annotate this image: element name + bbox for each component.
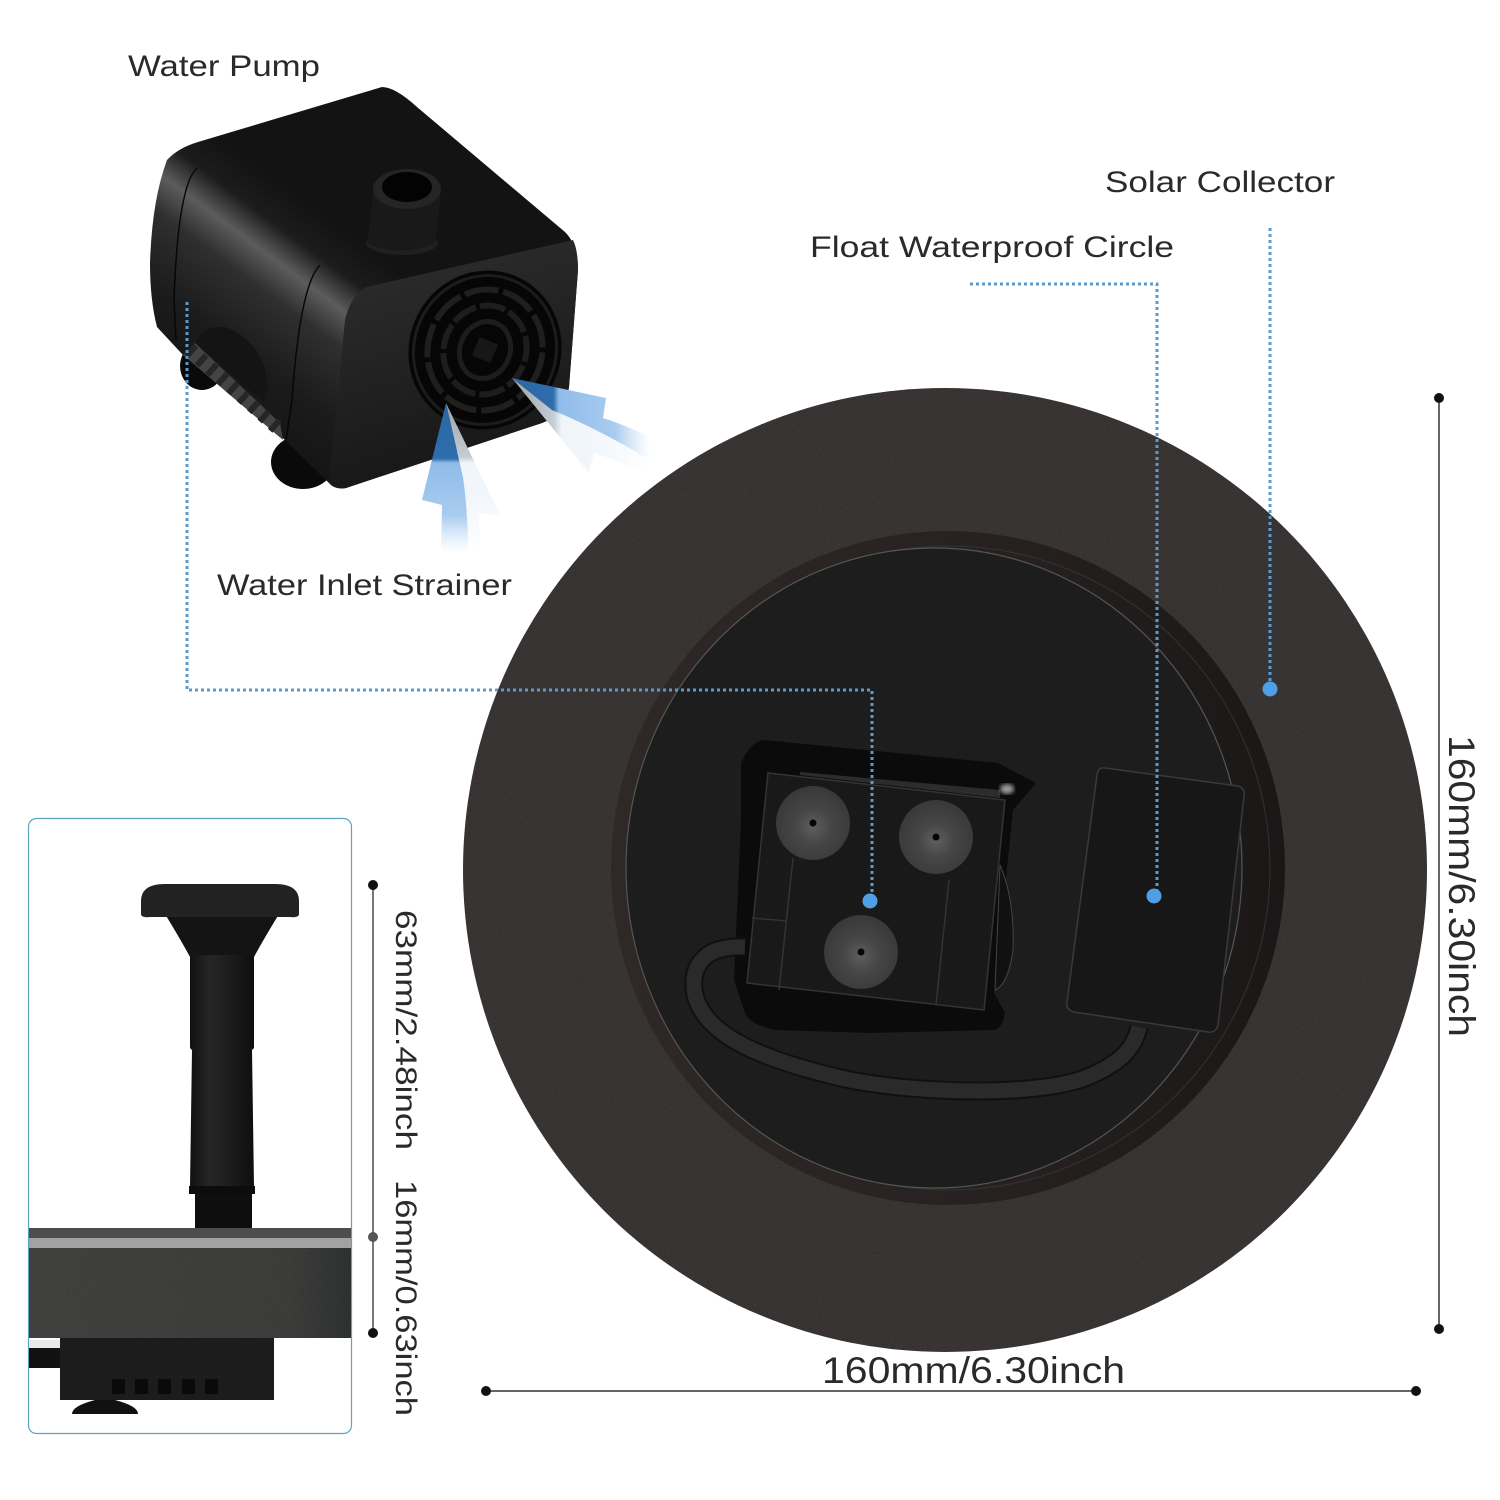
pump seams xyxy=(752,858,949,1005)
callout: pump leader xyxy=(187,302,878,908)
suction cups xyxy=(776,786,973,989)
pump vents xyxy=(800,772,1000,798)
solar panel back xyxy=(1067,768,1244,1032)
dimension: width of disc xyxy=(481,1350,1421,1396)
side seams xyxy=(174,168,320,440)
pump body xyxy=(150,87,578,488)
callout: float leader xyxy=(970,284,1162,904)
arrow one xyxy=(422,403,500,553)
callout: solar leader xyxy=(1262,228,1278,696)
faint rim line xyxy=(626,546,1270,1190)
water pump product xyxy=(150,87,585,489)
outer ring xyxy=(463,388,1427,1352)
pump fan edge xyxy=(995,865,1013,990)
pump under float xyxy=(29,1338,274,1414)
nozzle stem xyxy=(189,955,255,1230)
nozzle head xyxy=(141,884,299,957)
inner recess xyxy=(626,548,1242,1188)
float edge xyxy=(29,1228,351,1338)
inner band xyxy=(611,531,1285,1205)
pump recess xyxy=(734,740,1036,1033)
cable xyxy=(694,947,1139,1091)
dimension: height of disc: 160mm/6.30inch xyxy=(1441,735,1482,1037)
outlet nozzle xyxy=(366,169,441,255)
dimension: nozzle height xyxy=(368,880,422,1416)
bright spot xyxy=(1000,784,1014,794)
arrow two xyxy=(512,378,650,473)
grill xyxy=(385,247,585,453)
side circular recess xyxy=(195,327,268,402)
label: water inlet strainer: Water Inlet Strainer xyxy=(217,569,512,602)
label: water pump: Water Pump xyxy=(128,50,320,83)
pump back xyxy=(747,773,1005,1010)
float disc xyxy=(463,388,1427,1352)
dimension: nozzle height: 63mm/2.48inch xyxy=(389,910,422,1150)
panel: nozzle side view xyxy=(28,818,352,1434)
inlet arrows xyxy=(422,378,650,553)
dimension: width of disc: 160mm/6.30inch xyxy=(822,1350,1125,1391)
front face xyxy=(329,240,578,488)
label: float waterproof circle: Float Waterproof Circle xyxy=(810,231,1174,264)
label: solar collector: Solar Collector xyxy=(1105,166,1335,199)
dimension: height of disc xyxy=(1434,393,1482,1334)
pump feet xyxy=(180,342,335,489)
side ribs xyxy=(183,343,283,440)
dimension: nozzle height: 16mm/0.63inch xyxy=(389,1180,422,1416)
